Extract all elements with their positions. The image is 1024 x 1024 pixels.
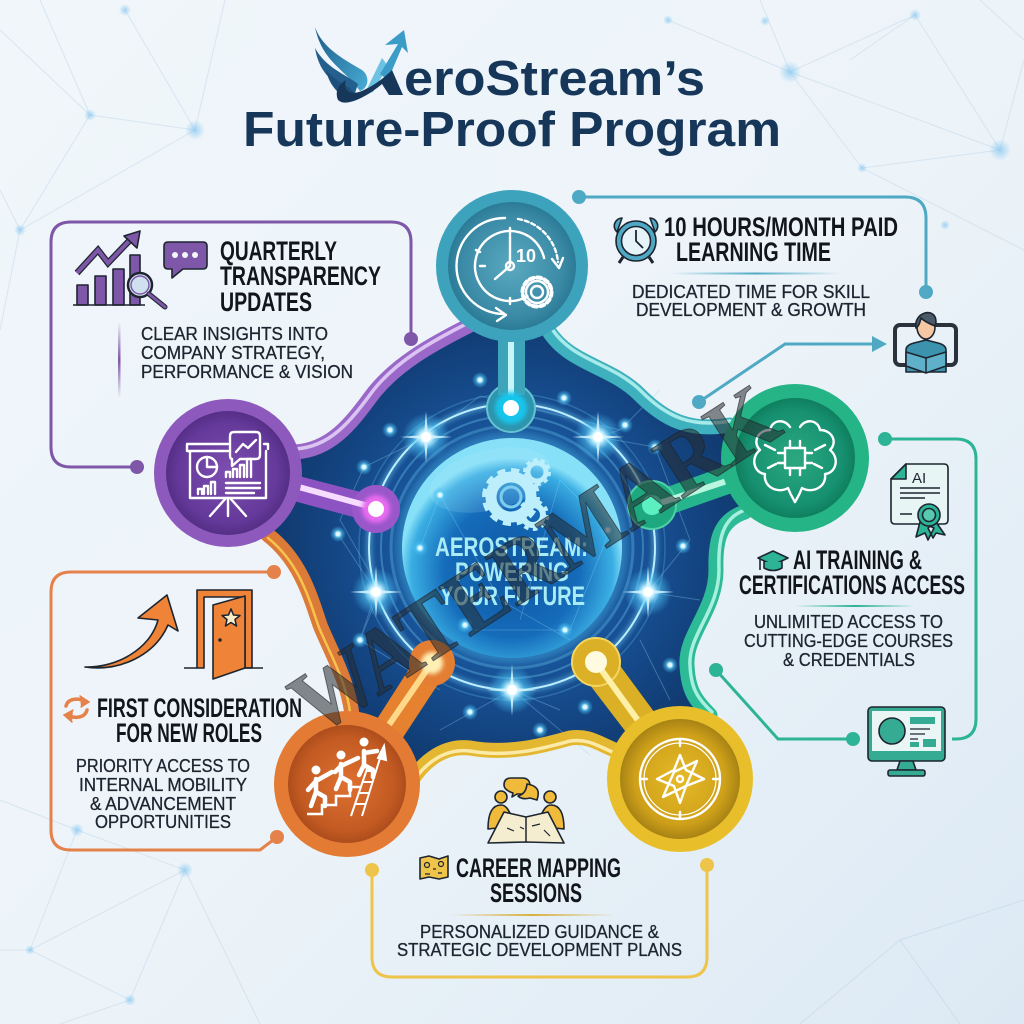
heading with map icon: SESSIONS — [490, 878, 582, 908]
icon: presentation board — [187, 432, 268, 516]
node: teal clock — [436, 190, 588, 342]
icon: people climbing stairs and ladder — [307, 738, 386, 816]
description — [141, 324, 353, 382]
description — [744, 612, 953, 670]
stem: purple — [290, 475, 400, 533]
description: PERFORMANCE & VISION — [141, 362, 353, 382]
heading: UPDATES — [220, 287, 312, 317]
icon: treasure map — [420, 856, 448, 879]
panel outline — [885, 439, 976, 739]
description: STRATEGIC DEVELOPMENT PLANS — [397, 940, 682, 960]
heading with graduation cap: AI TRAINING & — [793, 545, 922, 575]
logo: wing and arrow — [315, 27, 408, 103]
description: DEVELOPMENT & GROWTH — [636, 300, 866, 320]
icon: clock with gear — [456, 218, 563, 321]
description: CUTTING-EDGE COURSES — [744, 631, 953, 651]
icon: bar chart with magnifier — [73, 231, 165, 307]
description: COMPANY STRATEGY, — [141, 343, 325, 363]
heading: QUARTERLY — [220, 236, 337, 266]
title: eroStream’s — [404, 52, 705, 106]
icon: door with star — [184, 590, 263, 679]
heading: LEARNING TIME — [676, 237, 831, 267]
icon: computer monitor — [868, 707, 945, 776]
panel outline — [579, 197, 926, 292]
panel: 10 hours per month paid learning time — [572, 190, 956, 409]
hub label: POWERING — [455, 557, 569, 587]
panel outline — [372, 865, 707, 977]
icon: person reading — [895, 313, 956, 373]
description: UNLIMITED ACCESS TO — [754, 612, 943, 632]
description: & CREDENTIALS — [783, 650, 915, 670]
node: teal clock: 10 — [516, 246, 536, 266]
node: purple presentation — [154, 399, 302, 547]
description: CLEAR INSIGHTS INTO — [141, 324, 328, 344]
panel: AI training and certifications access — [709, 432, 976, 776]
heading with map icon — [420, 853, 621, 908]
node: yellow compass — [607, 706, 753, 852]
description: & ADVANCEMENT — [90, 794, 236, 814]
arrow — [692, 336, 887, 409]
title — [243, 27, 781, 157]
connector bands — [268, 322, 745, 783]
description: PERSONALIZED GUIDANCE & — [420, 922, 659, 942]
icon: graduation cap — [758, 551, 788, 570]
heading with map icon: CAREER MAPPING — [456, 853, 621, 883]
heading: TRANSPARENCY — [220, 261, 381, 291]
icon: alarm clock — [614, 218, 658, 263]
hub label: AEROSTREAM: — [435, 532, 588, 562]
icon: compass — [640, 739, 720, 819]
heading with swap icon: FOR NEW ROLES — [116, 718, 262, 748]
node: green brain — [721, 384, 869, 532]
panel: quarterly transparency updates — [51, 222, 418, 474]
title: Future-Proof Program — [243, 103, 781, 157]
description — [397, 922, 682, 960]
icon: two people with map — [488, 778, 564, 843]
hub label — [435, 532, 588, 611]
icon: brain with chip — [754, 421, 836, 502]
icon: gears — [485, 460, 549, 529]
heading with swap icon: FIRST CONSIDERATION — [97, 693, 302, 723]
heading with swap icon — [64, 693, 302, 748]
description: INTERNAL MOBILITY — [79, 775, 247, 795]
stem: yellow — [572, 638, 660, 740]
stem: orange — [370, 640, 455, 745]
heading with graduation cap — [739, 545, 965, 600]
icon: swap arrows — [64, 696, 89, 722]
icon: speech bubble — [164, 242, 207, 278]
heading: 10 HOURS/MONTH PAID — [664, 212, 898, 242]
panel: first consideration for new roles — [51, 565, 302, 850]
icon: AI certificate — [891, 464, 948, 540]
description: PRIORITY ACCESS TO — [76, 756, 250, 776]
central dark hub shape — [268, 325, 745, 780]
hub rings — [359, 394, 665, 700]
watermark: WATERMARK — [273, 366, 797, 754]
heading — [664, 212, 898, 267]
central sphere — [396, 432, 628, 664]
description — [76, 756, 250, 832]
hub label: YOUR FUTURE — [440, 581, 585, 611]
description: OPPORTUNITIES — [95, 812, 231, 832]
panel: career mapping sessions — [365, 778, 714, 977]
description — [632, 282, 870, 320]
icon: upward arrow — [85, 595, 178, 668]
heading — [220, 236, 381, 317]
stem: green — [628, 466, 735, 529]
hub network lines — [338, 390, 700, 755]
panel outline — [51, 572, 277, 850]
icon: AI certificate: AI — [912, 470, 926, 487]
node: orange ladder — [274, 711, 420, 857]
stem: teal — [487, 335, 535, 432]
panel outline — [51, 222, 411, 467]
description: DEDICATED TIME FOR SKILL — [632, 282, 870, 302]
